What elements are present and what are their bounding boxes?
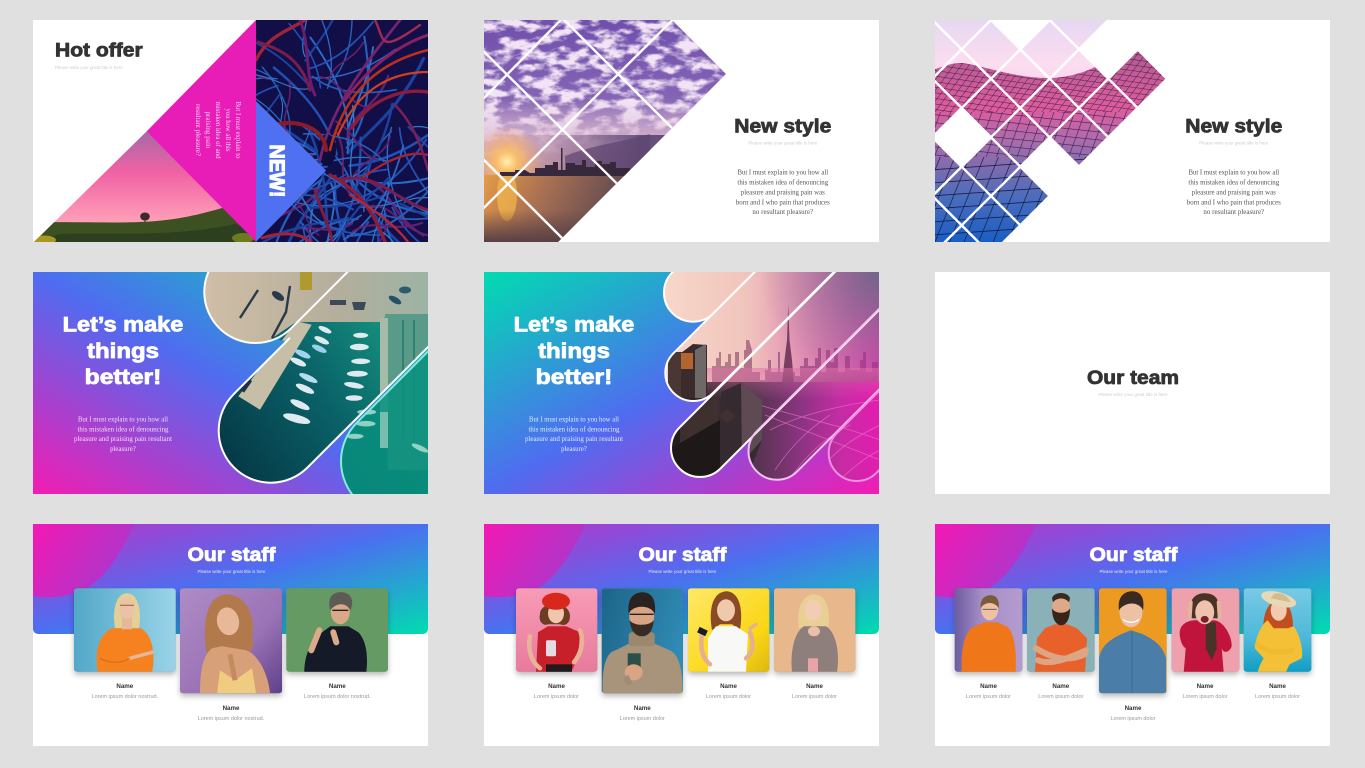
body text: But I must explain to you how all [529,416,619,423]
card: man in orange sweater [955,588,1023,672]
icon: tree [140,212,150,222]
magenta triangle [146,20,256,242]
captions: Name [1197,683,1214,690]
body text [736,170,830,216]
captions: Lorem ipsum dolor [1255,694,1300,700]
heading: better! [536,366,612,389]
heading: Let’s make [514,313,634,336]
capsule outlines [663,272,879,482]
photo: city capsules [663,272,879,482]
subtitle: Please write your great title is here [1199,140,1269,145]
rotated body text: resultant pleasure? [194,104,201,156]
captions: Lorem ipsum dolor [1038,694,1084,700]
header band [33,524,428,634]
captions [534,683,837,722]
burj [782,304,794,384]
body text: born and I who pain that produces [1187,199,1281,206]
captions: Lorem ipsum dolor nostrud. [198,716,264,722]
body text: no resultant pleasure? [752,209,813,216]
captions: Name [116,683,134,690]
captions: Name [223,705,240,712]
card: woman with red beret [516,588,598,672]
title: New style [734,115,831,137]
body text: born and I who pain that produces [736,199,830,206]
captions: Lorem ipsum dolor nostrud. [304,694,371,700]
card: man in denim shirt [1099,588,1167,693]
card: surprised woman [1172,588,1240,672]
captions: Lorem ipsum dolor [1110,716,1156,722]
subtitle: Please write your great title is here [1098,392,1168,397]
card: woman with straw hat [1244,588,1312,672]
label: NEW!: NEW! [265,144,288,198]
body text: But I must explain to you how all [78,416,168,423]
card: man pointing [286,588,388,672]
captions: Name [980,683,997,690]
panel: new style sunset [483,19,879,242]
header band [484,524,879,634]
photo: harbour capsules [203,272,428,494]
body text: pleasure and praising pain resultant [74,436,172,443]
rotated body text: you how all this [224,108,231,152]
body text: pleasure and praising pain was [741,189,825,196]
heading: better! [85,366,161,389]
heading [63,313,183,389]
captions [92,683,371,722]
rotated body text: praising pain [204,111,211,149]
panel: our team [935,272,1330,494]
boats [282,324,370,426]
body text [74,416,172,453]
captions: Lorem ipsum dolor [792,694,837,700]
header band [935,524,1330,634]
body text: pleasure and praising pain was [1192,189,1276,196]
heading: things [87,340,159,363]
blue triangle [256,101,326,242]
captions: Lorem ipsum dolor [534,694,579,700]
panel: new style roof [935,20,1330,242]
panel: our staff three [33,524,428,746]
card: woman in grey coat [774,588,856,672]
captions: Name [1052,683,1070,690]
heading: Let’s make [63,313,183,336]
ground [668,382,879,480]
body text: no resultant pleasure? [1203,209,1264,216]
rotated body text [194,102,241,159]
body text: this mistaken idea of denouncing [1188,180,1280,186]
photo: roof tiles in diamonds [935,20,1166,242]
panel: let's make things better city [484,272,879,494]
title: Our staff [188,544,276,566]
body text [1187,170,1281,216]
captions: Lorem ipsum dolor [966,694,1011,700]
heading: things [538,340,610,363]
building centre [720,383,762,470]
captions: Lorem ipsum dolor [706,694,751,700]
card: bearded man [1027,588,1095,672]
photo: pink sky landscape [32,131,257,244]
heading [514,313,634,389]
body text: But I must explain to you how all [737,170,828,177]
skyline far [712,340,878,382]
captions: Lorem ipsum dolor nostrud. [92,694,158,700]
captions: Name [1269,683,1286,690]
captions [966,683,1300,722]
panel: let's make things better harbour [33,272,428,494]
subtitle: Please write your great title is here [1100,569,1168,574]
title: Hot offer [55,41,143,62]
body text: this mistaken idea of denouncing [528,426,620,433]
rotated body text: mistaken idea of and [214,102,221,159]
card: woman in orange sweater [74,588,176,672]
panel: our staff four [484,524,879,746]
title: Our staff [638,544,727,566]
captions: Name [1125,705,1142,712]
subtitle: Please write your great title is here [198,569,266,574]
captions: Name [548,683,565,690]
card: woman with wavy hair [180,588,282,693]
panel: hot offer [33,20,428,242]
photo: abstract strands [256,20,428,242]
card: man with phone [602,588,684,693]
captions: Name [634,705,651,712]
captions: Name [329,683,346,690]
captions: Name [806,683,823,690]
body text: pleasure and praising pain resultant [525,436,623,443]
building left [668,344,707,398]
capsule outlines [203,272,428,494]
subtitle: Please write your great title is here [55,65,123,70]
captions: Lorem ipsum dolor [620,716,665,722]
body text: pleasure? [561,446,587,453]
body text: But I must explain to you how all [1188,170,1279,177]
teal overlay capsule [342,353,428,494]
subtitle: Please write your great title is here [748,140,818,145]
panel: our staff five [935,524,1330,746]
rotated body text: But I must explain to [234,102,241,159]
photo: sunset skyline in diamonds [483,19,729,242]
title: Our staff [1090,544,1178,566]
captions: Lorem ipsum dolor [1182,694,1228,700]
body text: this mistaken idea of denouncing [737,180,829,186]
body text [525,416,623,453]
captions: Name [720,683,737,690]
subtitle: Please write your great title is here [648,569,717,574]
body text: pleasure? [110,446,136,453]
card: woman on yellow [688,588,770,672]
body text: this mistaken idea of denouncing [78,426,169,433]
title: New style [1185,115,1282,137]
skyline [500,148,640,176]
title: Our team [1087,368,1179,389]
